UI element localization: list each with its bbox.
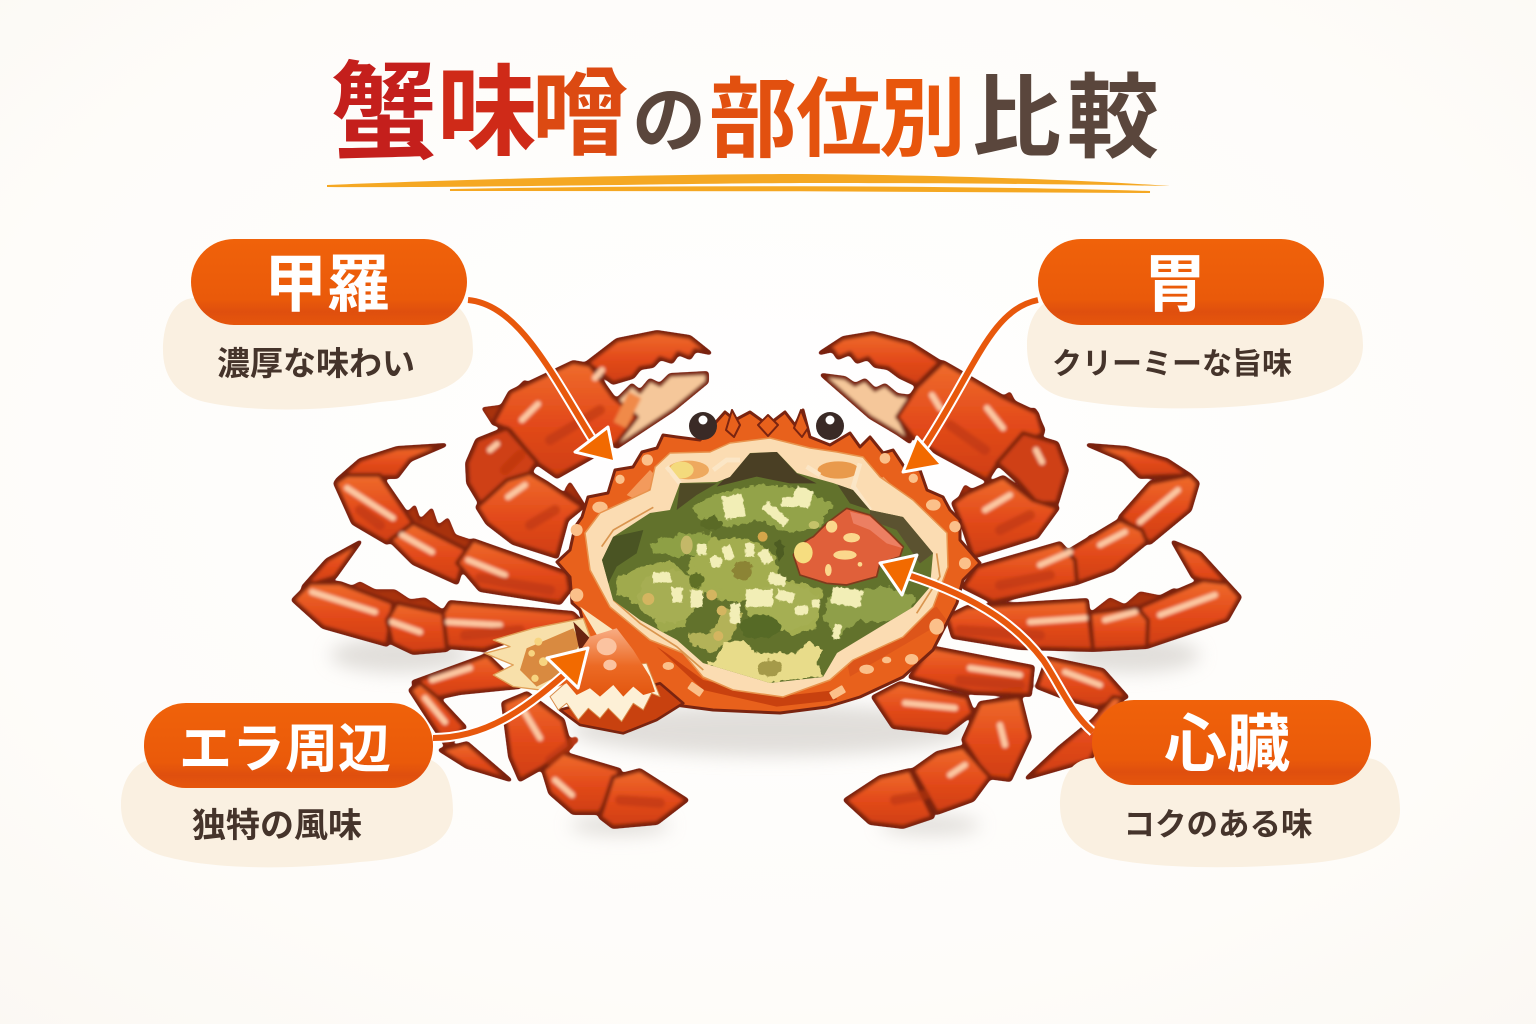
label: 心臓: コクのある味: [1123, 806, 1313, 842]
crab butter cavity: [602, 452, 933, 683]
left claw: [467, 332, 710, 557]
title: 位: [796, 72, 882, 168]
label: エラ周辺: [121, 703, 453, 867]
stomach patch: [793, 508, 903, 585]
carapace shell: [557, 410, 980, 713]
title: 噌: [532, 61, 628, 168]
arrow: エラ周辺 to gill: [433, 648, 588, 738]
label: 心臓: 心臓: [1164, 710, 1290, 780]
title: 比: [972, 68, 1061, 168]
arrow: 甲羅 to shell: [468, 300, 615, 462]
label: 甲羅: [163, 239, 473, 410]
head horns: [726, 410, 808, 437]
right claw: [820, 333, 1067, 557]
gill: [485, 607, 683, 733]
title: 別: [879, 71, 966, 168]
left legs: [293, 445, 687, 827]
right legs: [845, 445, 1240, 827]
label: 心臓: [1060, 700, 1400, 867]
shell inner rim: [585, 438, 948, 697]
title: 部: [709, 70, 797, 169]
label: 胃: 胃: [1144, 250, 1206, 320]
title: の: [632, 79, 706, 162]
label: 胃: [1027, 239, 1363, 408]
title underline: [327, 174, 1170, 192]
title: 味: [437, 57, 537, 169]
icon: right eye: [816, 412, 844, 440]
label: 胃: クリーミーな旨味: [1052, 348, 1292, 381]
title: [331, 55, 1159, 173]
label: エラ周辺: エラ周辺: [179, 720, 391, 779]
crab illustration: [293, 332, 1240, 827]
label: エラ周辺: 独特の風味: [192, 807, 362, 845]
title: 較: [1067, 68, 1159, 170]
crab ground shadow: [330, 637, 1200, 835]
arrow: 胃 to stomach: [903, 300, 1038, 472]
label: 甲羅: 濃厚な味わい: [217, 345, 415, 382]
arrow: 心臓 to heart: [880, 555, 1093, 732]
title: 蟹: [331, 55, 437, 173]
icon: left eye: [689, 412, 717, 440]
label: 甲羅: 甲羅: [264, 250, 390, 320]
